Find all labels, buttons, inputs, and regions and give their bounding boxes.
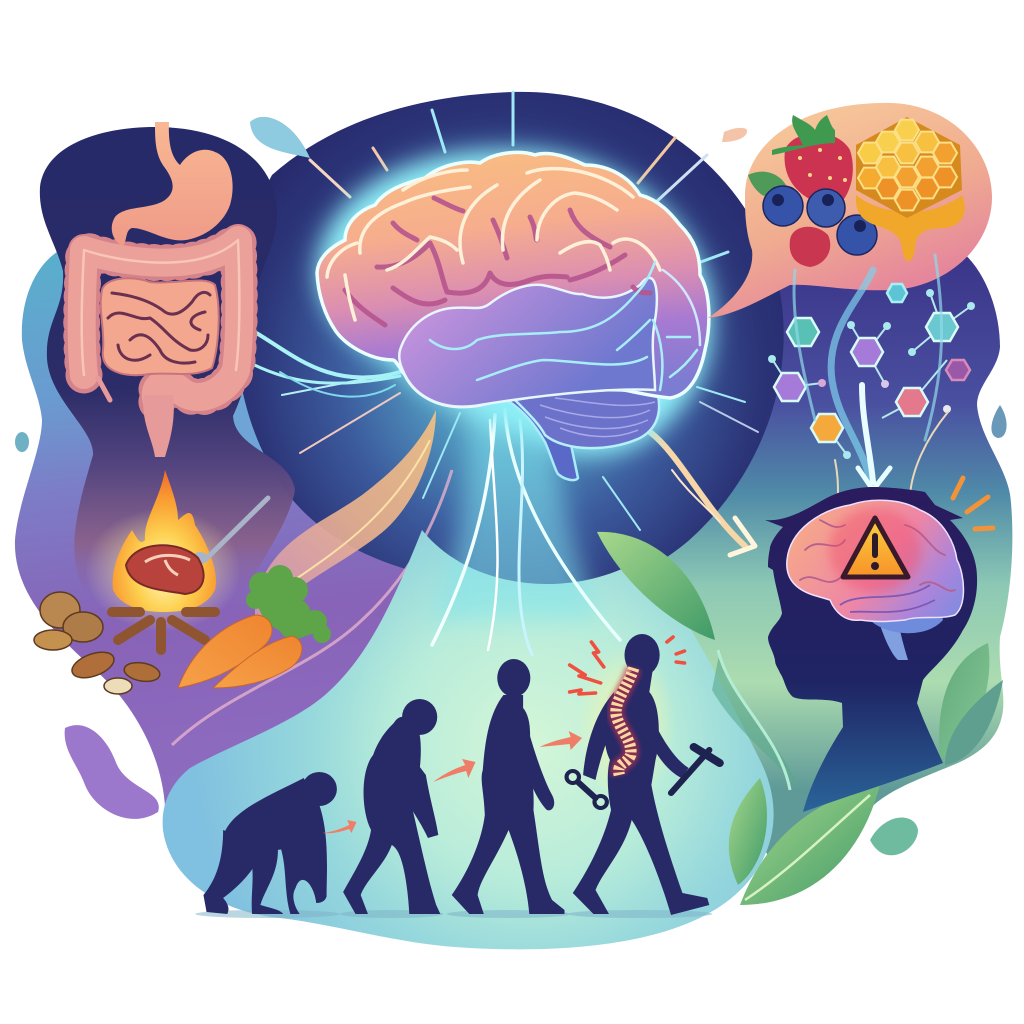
central brain — [317, 150, 712, 480]
decorative splashes — [15, 117, 1007, 855]
panel: lower evolution background — [163, 530, 774, 949]
blueberries — [763, 186, 877, 255]
background: blue swirl between gut and circle — [233, 200, 400, 530]
figure 3: early human — [452, 659, 564, 914]
evolution figures — [195, 634, 720, 918]
appendix — [98, 378, 110, 400]
small intestine — [101, 278, 219, 375]
cerebellum and stem — [507, 390, 659, 480]
raspberry — [790, 227, 830, 267]
large intestine — [82, 240, 239, 405]
cream gyri highlights — [327, 169, 660, 320]
figure 4: glow behind — [577, 643, 676, 807]
logs — [112, 612, 215, 650]
bond balls — [768, 289, 975, 459]
steak — [126, 545, 204, 594]
pain marks — [570, 637, 684, 694]
background: dark radial circle behind brain — [235, 92, 784, 591]
gut illustration — [82, 122, 239, 457]
molecules — [768, 284, 975, 459]
evolution arrows — [322, 731, 582, 833]
brain body — [317, 152, 709, 407]
nuts — [34, 592, 161, 694]
hexagons — [774, 284, 970, 442]
bonds — [772, 293, 971, 455]
background: right panel — [640, 250, 1012, 880]
warning triangle — [829, 508, 921, 592]
stomach — [112, 122, 233, 246]
figure 4: modern human — [573, 634, 709, 915]
glow rays around brain — [282, 92, 758, 530]
campfire with steak — [85, 470, 268, 650]
small brain — [787, 500, 964, 660]
spine — [616, 668, 634, 775]
hammer — [671, 747, 720, 793]
leaf — [748, 172, 786, 196]
arrow down to head — [794, 255, 948, 495]
strawberry — [772, 115, 853, 208]
central glow column — [430, 400, 600, 620]
ground shadows — [195, 910, 712, 918]
alert marks — [953, 478, 993, 529]
head silhouette with warning brain — [765, 478, 993, 812]
panel: gut background — [40, 127, 295, 600]
carrots — [178, 565, 331, 688]
dark sulci — [345, 198, 650, 325]
carrot greens — [246, 565, 331, 643]
temporal lobe — [399, 278, 657, 407]
figure 1: ape — [203, 772, 337, 914]
figure 2: hominid — [343, 699, 440, 914]
peach ribbon from brain to carrots — [172, 410, 452, 745]
flow streams from brain — [235, 325, 755, 655]
wrench — [567, 771, 607, 808]
food bubble — [708, 103, 992, 318]
leaves around figures — [597, 532, 1003, 905]
temporal cyan lines — [430, 262, 700, 390]
brain glow — [317, 150, 712, 455]
background: left flowing blob — [15, 220, 500, 900]
rectum tail — [143, 395, 174, 457]
honeycomb — [856, 117, 962, 218]
honey drip — [856, 195, 965, 261]
